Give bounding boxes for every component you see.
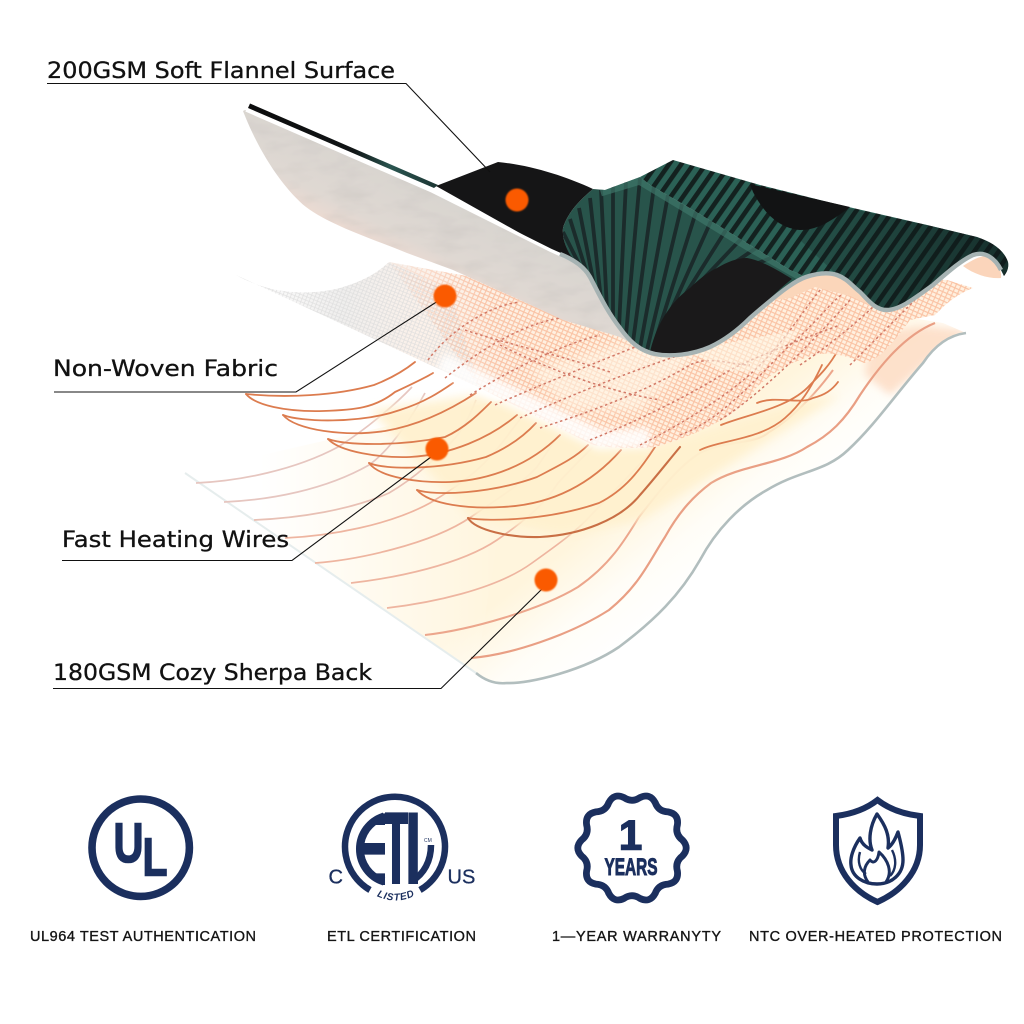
front green fold xyxy=(562,177,804,350)
icon: 1 year badge: YEARS xyxy=(604,854,658,881)
icon: ETL mark: C xyxy=(328,866,343,888)
black blob on back fold xyxy=(750,184,850,230)
grey mesh left xyxy=(236,262,480,388)
callout: non-woven fabric xyxy=(53,284,456,392)
panel: sherpa back layer xyxy=(185,300,970,683)
icon: ETL mark: L xyxy=(404,791,444,907)
icon: ETL mark xyxy=(328,794,475,900)
peach underside at right end xyxy=(963,256,1001,278)
white and grey edge xyxy=(246,110,570,259)
icon: ETL mark: US xyxy=(448,866,475,888)
fan stripes xyxy=(560,178,771,350)
callout: fast heating wires xyxy=(62,438,448,560)
icon: ETL mark: T xyxy=(379,791,413,907)
back fold shading xyxy=(800,202,1008,310)
light ridge xyxy=(600,178,806,277)
lower wires on sherpa xyxy=(196,323,935,658)
caption: warranty: 1—YEAR WARRANYTY xyxy=(552,929,721,945)
top edge sliver xyxy=(248,104,438,188)
caption: NTC: NTC OVER-HEATED PROTECTION xyxy=(749,929,1002,945)
panel: non-woven fabric mesh xyxy=(236,262,973,448)
black flannel patch front xyxy=(650,258,792,355)
white folds in mesh xyxy=(690,330,800,372)
caption: UL964: UL964 TEST AUTHENTICATION xyxy=(30,929,256,945)
sherpa grey edge xyxy=(476,333,966,683)
label text: 180GSM Cozy Sherpa Back xyxy=(53,661,372,686)
icon: 1 year badge xyxy=(578,796,686,900)
icon: ETL mark: E xyxy=(348,792,392,908)
icon: UL mark xyxy=(92,799,189,896)
panel: heating wires layer xyxy=(246,350,840,537)
orange mesh xyxy=(389,262,973,448)
cream middle of mesh xyxy=(530,345,700,410)
wire glow xyxy=(370,395,840,535)
sherpa left edge xyxy=(185,473,476,673)
label text: Non-Woven Fabric xyxy=(53,357,278,382)
panel: flannel surface xyxy=(243,104,1008,365)
white band along lower mesh edge xyxy=(440,362,650,440)
icon: UL mark: U xyxy=(114,811,144,874)
icon: ETL mark: CM xyxy=(424,838,432,844)
icon: UL mark: L xyxy=(142,828,168,888)
peach fold below fabric xyxy=(775,273,876,308)
sherpa peach top end xyxy=(865,326,970,395)
silver underside xyxy=(243,110,655,357)
black flannel upper xyxy=(436,162,593,260)
label text: 200GSM Soft Flannel Surface xyxy=(47,59,395,84)
icon: ETL mark: LISTED xyxy=(376,890,414,900)
back green fold xyxy=(640,160,1008,310)
callout: 180GSM cozy sherpa back xyxy=(53,568,558,688)
caption: ETL: ETL CERTIFICATION xyxy=(327,929,476,945)
icon: shield with flame xyxy=(836,800,920,902)
callout: 200GSM soft flannel surface xyxy=(47,59,528,212)
label text: Fast Heating Wires xyxy=(62,528,289,553)
icon: 1 year badge: 1 xyxy=(619,812,642,858)
mesh dashed wires xyxy=(428,288,915,445)
